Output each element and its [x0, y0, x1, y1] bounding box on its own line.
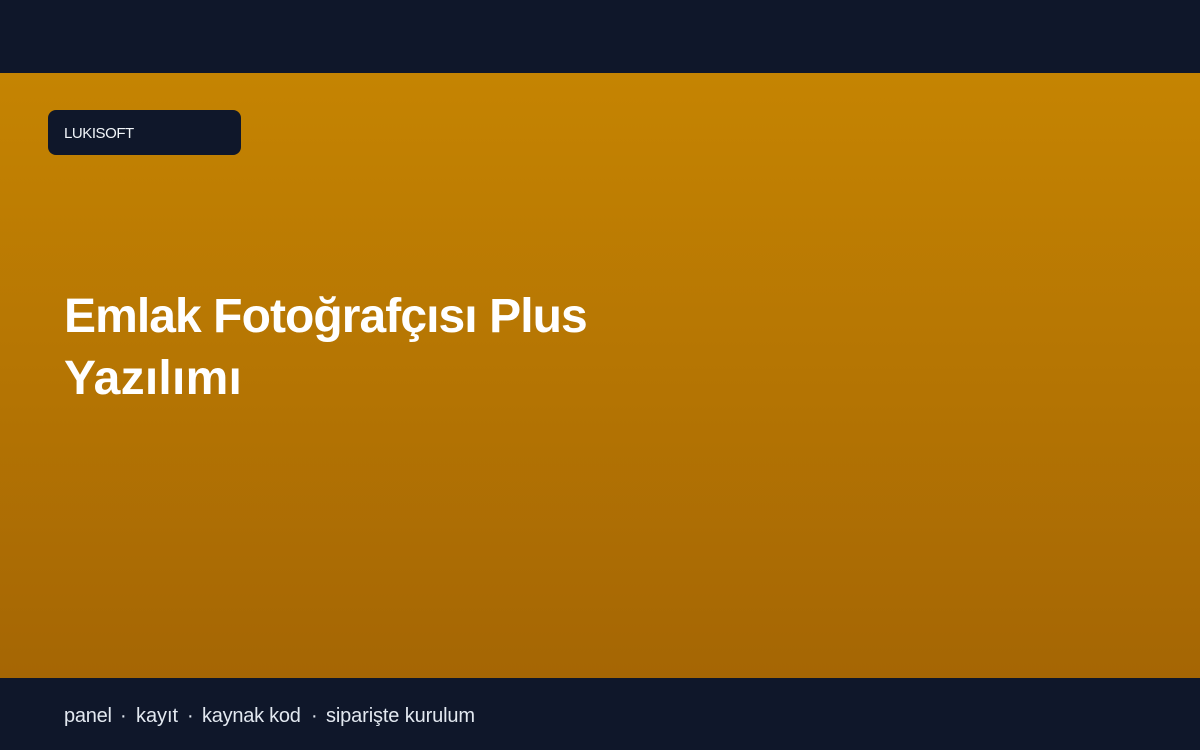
footer text: · [187, 705, 194, 727]
footer text: kaynak kod [202, 705, 301, 727]
footer text: kayıt [136, 705, 178, 727]
title: Yazılımı [64, 352, 242, 405]
title: Emlak Fotoğrafçısı Plus [64, 290, 587, 343]
title [64, 290, 587, 405]
top bar [0, 0, 1200, 73]
footer text: siparişte kurulum [326, 705, 475, 727]
footer bar [0, 678, 1200, 750]
footer text [64, 705, 475, 727]
footer text: · [311, 705, 318, 727]
badge label: LUKISOFT [64, 125, 134, 142]
footer text: panel [64, 705, 112, 727]
badge: brand [48, 110, 241, 155]
footer text: · [120, 705, 127, 727]
